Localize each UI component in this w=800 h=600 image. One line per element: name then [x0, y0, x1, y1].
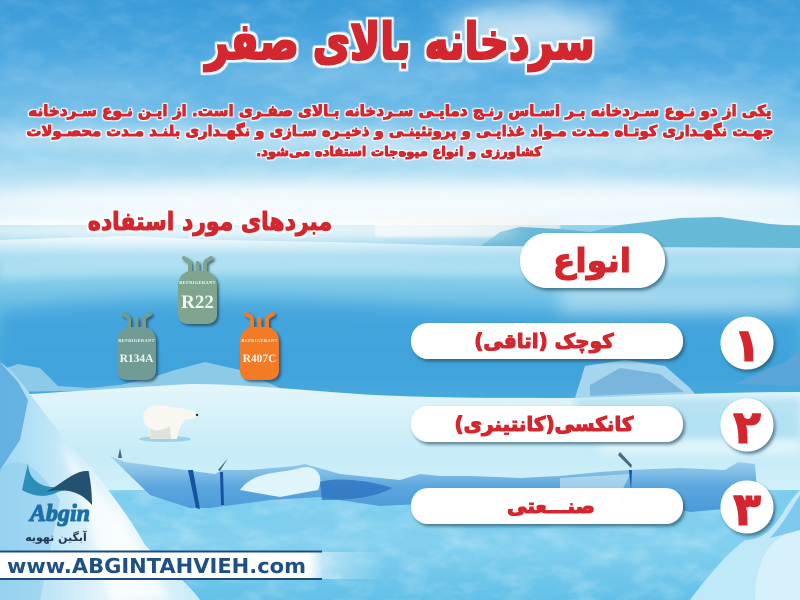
distant ice ridge — [0, 362, 280, 392]
intro paragraph: جهـت نگهـداری کوتـاه مـدت مـواد غذایـی و پروتئینـی و ذخیـره سـازی و نگهـداری بلنـد مـدت محصـولات — [26, 122, 774, 140]
refrigerant cylinder: R407C: REFRIGERANT — [241, 338, 278, 343]
right iceberg — [690, 490, 800, 600]
website bar — [0, 550, 385, 580]
intro paragraph: کشاورزی و انواع میوه‌جات استفاده می‌شود. — [256, 145, 542, 160]
refrigerant cylinder: R407C — [240, 314, 279, 380]
intro paragraph — [26, 102, 774, 160]
intro paragraph: یکی از دو نـوع سـردخانه بـر اسـاس رنـج دمایـی سـردخانه بـالای صفـری است. از ایـن نـوع سـردخانه — [28, 102, 772, 120]
logo: Abgin: آبگین تهویه — [25, 530, 87, 544]
heading pill: types: انواع — [553, 241, 631, 281]
item 1: small: ۱ — [733, 318, 761, 372]
icon: logo waves — [22, 463, 92, 505]
item 2: condensing container: کانکسی(کانتینری) — [454, 412, 634, 436]
item 2: condensing container: ۲ — [733, 400, 761, 454]
heading: refrigerants used: مبردهای مورد استفاده — [88, 207, 332, 236]
heading pill: types — [520, 233, 665, 288]
item 3: industrial: صنـــعتی — [507, 494, 595, 518]
icon: polar bear — [139, 405, 198, 442]
refrigerant cylinder: R407C: R407C — [243, 353, 276, 365]
refrigerant cylinder: R22 — [178, 258, 217, 324]
logo: Abgin — [22, 463, 92, 544]
ice cliff — [110, 456, 757, 512]
website bar: www.ABGINTAHVIEH.com — [7, 554, 306, 578]
refrigerant cylinder: R22: REFRIGERANT — [179, 280, 216, 285]
item 3: industrial: ۳ — [733, 482, 761, 536]
logo: Abgin: Abgin — [28, 501, 90, 527]
item 2: condensing container — [411, 398, 774, 454]
panel: types — [411, 233, 774, 536]
item 3: industrial — [411, 480, 774, 536]
refrigerant cylinder: R134A: REFRIGERANT — [118, 338, 155, 343]
refrigerant cylinder: R134A — [117, 314, 156, 380]
left iceberg — [0, 362, 200, 600]
refrigerant cylinder: R134A: R134A — [120, 353, 154, 365]
title: سردخانه بالای صفر — [204, 11, 595, 71]
item 1: small: کوچک (اتاقی) — [474, 329, 614, 354]
item 1: small — [411, 316, 774, 372]
refrigerant cylinder: R22: R22 — [181, 292, 214, 313]
